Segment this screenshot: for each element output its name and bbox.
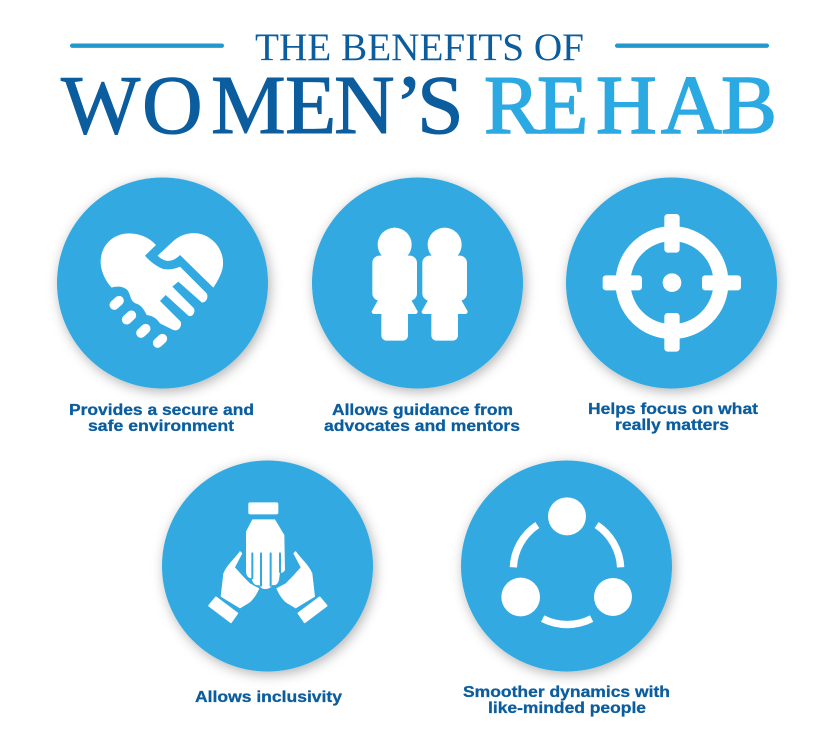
title	[61, 25, 777, 152]
icon: three stacked hands	[209, 502, 327, 622]
right title rule	[615, 44, 769, 48]
left title rule	[70, 44, 224, 48]
label: safe environment	[88, 418, 235, 435]
panel: guidance from advocates and mentors	[312, 178, 523, 435]
icon: handshake heart	[101, 233, 223, 343]
label: Provides a secure and	[69, 402, 254, 419]
label	[588, 401, 759, 434]
circle	[566, 178, 777, 388]
title word: women's: WOMEN’S	[61, 59, 464, 152]
label	[463, 684, 670, 717]
label: like-minded people	[488, 700, 646, 717]
circle	[312, 178, 523, 388]
label	[324, 402, 520, 435]
label	[69, 402, 254, 435]
panel: focus on what really matters	[566, 178, 777, 434]
circle	[57, 178, 268, 388]
panel: inclusivity	[162, 460, 373, 706]
title word: rehab: REHAB	[484, 59, 777, 152]
circle	[162, 460, 373, 672]
panel: secure and safe environment	[57, 178, 268, 435]
label: advocates and mentors	[324, 418, 520, 435]
icon: crosshair target	[603, 214, 741, 352]
label: Helps focus on what	[588, 401, 759, 418]
label: Smoother dynamics with	[463, 684, 670, 701]
label: Allows guidance from	[332, 402, 513, 419]
icon: two women	[372, 228, 468, 341]
label: really matters	[615, 417, 729, 434]
title line: the benefits of: THE BENEFITS OF	[255, 25, 584, 69]
label: Allows inclusivity	[195, 689, 342, 706]
circle	[461, 460, 672, 672]
panel: dynamics with like-minded people	[461, 460, 672, 717]
icon: three connected circles	[501, 497, 632, 625]
